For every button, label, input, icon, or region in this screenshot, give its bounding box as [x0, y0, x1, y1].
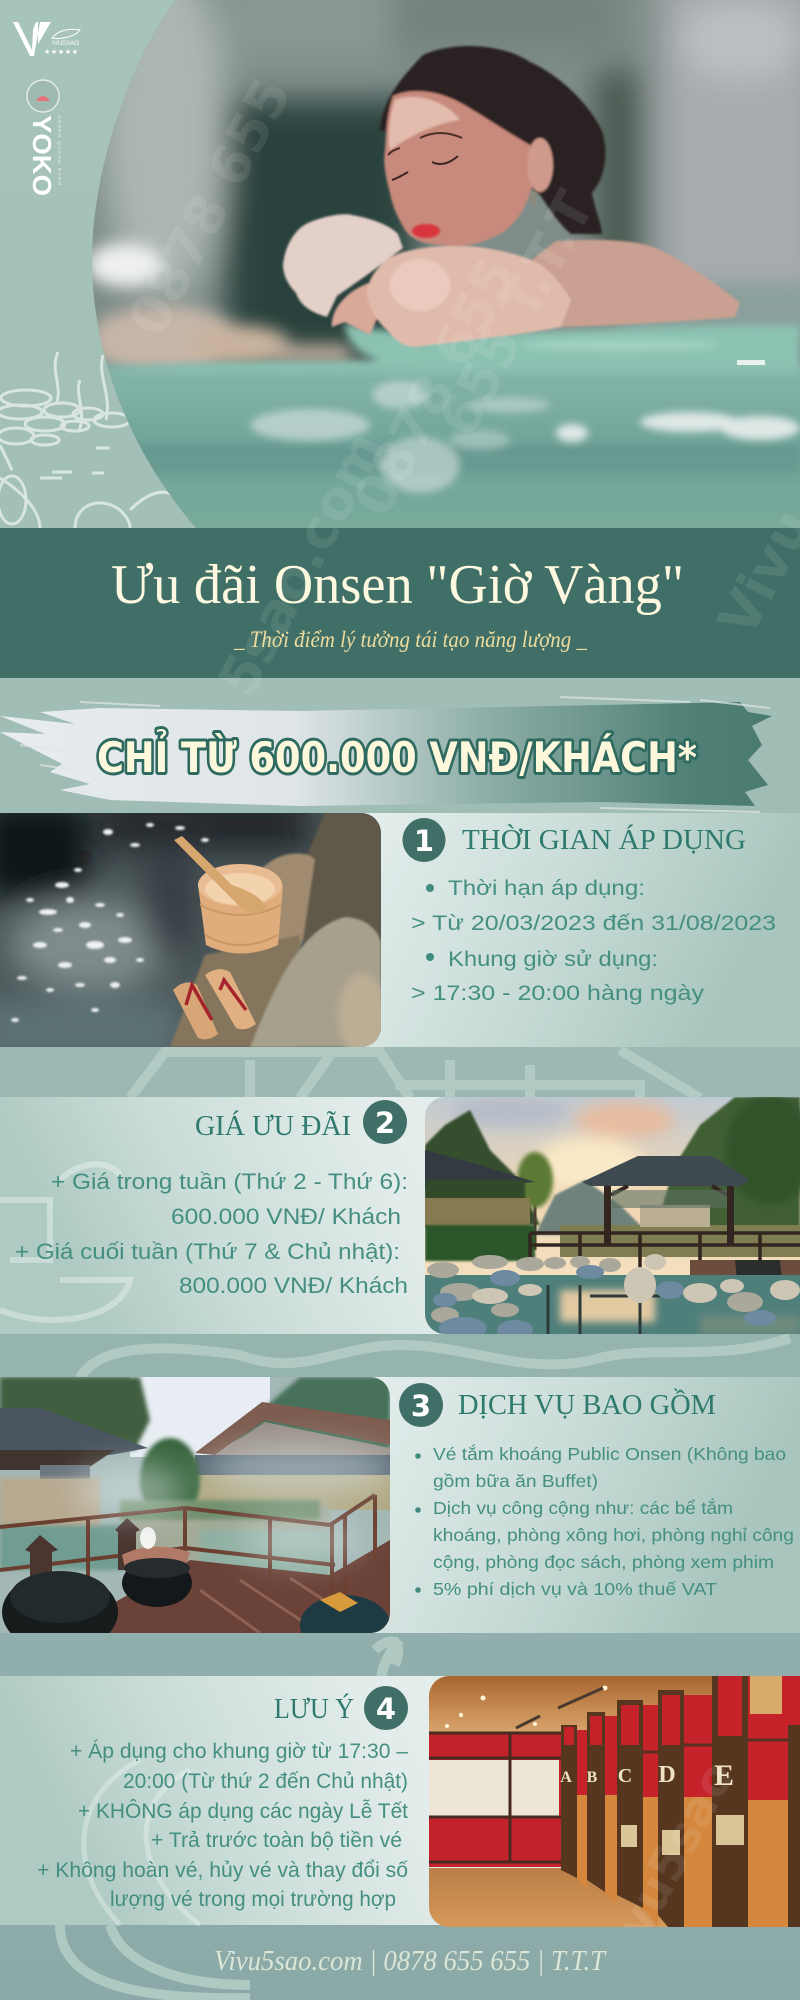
- number badge 2: [363, 1100, 407, 1144]
- logo: Vivu5sao: ★★★★★: [44, 48, 78, 56]
- tree: [534, 1204, 536, 1250]
- locker columns: [561, 1676, 800, 1927]
- services list: Vé tắm khoáng Public Onsen (Không bao: [433, 1443, 786, 1464]
- heading 3: DỊCH VỤ BAO GỒM: [458, 1387, 716, 1421]
- stone lamps: [25, 1535, 58, 1576]
- price details: + Giá cuối tuần (Thứ 7 & Chủ nhật):: [15, 1239, 400, 1264]
- services list: 5% phí dịch vụ và 10% thuế VAT: [433, 1579, 717, 1599]
- number badge 3: 3: [411, 1389, 431, 1423]
- ceiling lights: [445, 1686, 608, 1728]
- notes list: lượng vé trong mọi trường hợp: [110, 1888, 396, 1911]
- banner brush stroke: [0, 697, 772, 812]
- pavilion: [582, 1156, 750, 1246]
- locker letters: C: [618, 1765, 632, 1787]
- locker letters: D: [658, 1762, 676, 1788]
- stones: [427, 1254, 800, 1340]
- period details: Khung giờ sử dụng:: [448, 948, 658, 971]
- title band watermark: 5sao.com: [206, 421, 397, 706]
- locker letters: E: [714, 1759, 734, 1792]
- hero background line art: pebbles and steam: [0, 352, 172, 528]
- number badge 3: [399, 1383, 443, 1427]
- heading 4: LƯU Ý: [274, 1692, 354, 1725]
- hero watermarks: 655 T.T.T: [426, 181, 607, 446]
- hero watermarks: 0878 655: [341, 248, 529, 526]
- photo: outdoor onsen at sunset: [425, 1095, 800, 1340]
- lockers: [577, 1795, 790, 1927]
- notes list: + KHÔNG áp dụng các ngày Lễ Tết: [78, 1800, 408, 1823]
- roofs: [0, 1402, 390, 1522]
- bather and pots: [2, 1527, 389, 1633]
- services list: gồm bữa ăn Buffet): [433, 1471, 598, 1491]
- column lattices: [621, 1815, 744, 1855]
- locker letters: A: [560, 1769, 572, 1786]
- footer contact line: Vivu5sao.com | 0878 655 655 | T.T.T: [214, 1945, 607, 1977]
- logo: Yoko Onsen: YOKO: [27, 115, 57, 196]
- title: Ưu đãi Onsen "Giờ Vàng": [111, 554, 684, 616]
- notes list: + Không hoàn vé, hủy vé và thay đổi số: [37, 1859, 408, 1882]
- photo: outdoor pots with mist: [0, 1377, 395, 1655]
- notes list: 20:00 (Từ thứ 2 đến Chủ nhật): [123, 1770, 408, 1793]
- price banner: [0, 697, 772, 812]
- columns: [561, 1676, 800, 1927]
- left building: [425, 1150, 535, 1261]
- deck: [110, 1540, 390, 1633]
- panel 4: notes: [0, 1676, 800, 1927]
- locker letters: [560, 1766, 732, 1785]
- logo: Vivu5sao: [13, 22, 80, 56]
- logo: Vivu5sao: IVU5SAO: [52, 40, 79, 47]
- period details: > Từ 20/03/2023 đến 31/08/2023: [411, 912, 776, 935]
- period details: > 17:30 - 20:00 hàng ngày: [411, 982, 705, 1005]
- hero watermarks: [116, 68, 607, 526]
- period details: Thời hạn áp dụng:: [448, 877, 645, 900]
- title band watermark: [206, 421, 800, 706]
- price details: 800.000 VNĐ/ Khách: [179, 1273, 408, 1298]
- mountains: [425, 1095, 800, 1235]
- notes list: [37, 1740, 408, 1911]
- woman: [283, 46, 740, 347]
- services list: cộng, phòng đọc sách, phòng xem phim: [433, 1552, 774, 1572]
- number badge 1: 1: [414, 824, 434, 858]
- services list: Dịch vụ công cộng như: các bể tắm: [433, 1497, 733, 1518]
- price details: + Giá trong tuần (Thứ 2 - Thứ 6):: [51, 1169, 408, 1194]
- background line art: architecture between panels: [60, 1050, 790, 1998]
- locker letters: B: [587, 1769, 598, 1786]
- services list: khoáng, phòng xông hơi, phòng nghỉ công: [433, 1525, 794, 1545]
- panel 4 watermark: Vivu5sao: [581, 1753, 746, 1996]
- period details: [411, 877, 776, 1005]
- sandals: [173, 969, 256, 1039]
- bucket: [174, 836, 283, 954]
- price details: 600.000 VNĐ/ Khách: [171, 1204, 401, 1229]
- panel 2: preferential price: [0, 1095, 800, 1340]
- mist: [75, 1445, 395, 1560]
- number badge 4: [364, 1686, 408, 1730]
- rocks: [170, 813, 386, 1057]
- notes list: + Áp dụng cho khung giờ từ 17:30 –: [70, 1740, 408, 1763]
- logo: Yoko Onsen: [27, 80, 62, 196]
- heading 2: GIÁ ƯU ĐÃI: [195, 1109, 351, 1142]
- number badge 1: [402, 818, 446, 862]
- logo: Yoko Onsen: ONSEN QUANG HANH: [57, 115, 62, 185]
- column red tops: [564, 1676, 742, 1745]
- price details: [15, 1169, 408, 1298]
- heading 1: THỜI GIAN ÁP DỤNG: [462, 823, 746, 856]
- recessed red walls between columns: [577, 1676, 800, 1800]
- hero photo: woman relaxing in onsen: [80, 0, 800, 535]
- notes list: + Trả trước toàn bộ tiền vé: [151, 1829, 402, 1852]
- hero section: [0, 0, 800, 535]
- water: [425, 1275, 800, 1334]
- photo: locker room: [429, 1676, 800, 1927]
- railing: [0, 1494, 377, 1576]
- mountains: [0, 1377, 390, 1454]
- panel 4 line art: [84, 1760, 200, 1925]
- banner text: CHỈ TỪ 600.000 VNĐ/KHÁCH*: [97, 728, 697, 782]
- services list: [415, 1443, 794, 1599]
- hero watermarks: 0878 655: [116, 68, 304, 346]
- panel 1: application period: [0, 800, 800, 1060]
- photo: wooden bucket and sandals: [0, 813, 381, 1047]
- panel 2 line art: [0, 1164, 130, 1320]
- rocks and water: [0, 1478, 330, 1575]
- panel 3: included services: [0, 1377, 800, 1655]
- number badge 4: 4: [376, 1692, 396, 1726]
- title band: [0, 421, 800, 706]
- number badge 2: 2: [375, 1106, 395, 1140]
- railing: [528, 1231, 800, 1268]
- subtitle: _ Thời điểm lý tưởng tái tạo năng lượng _: [233, 627, 587, 652]
